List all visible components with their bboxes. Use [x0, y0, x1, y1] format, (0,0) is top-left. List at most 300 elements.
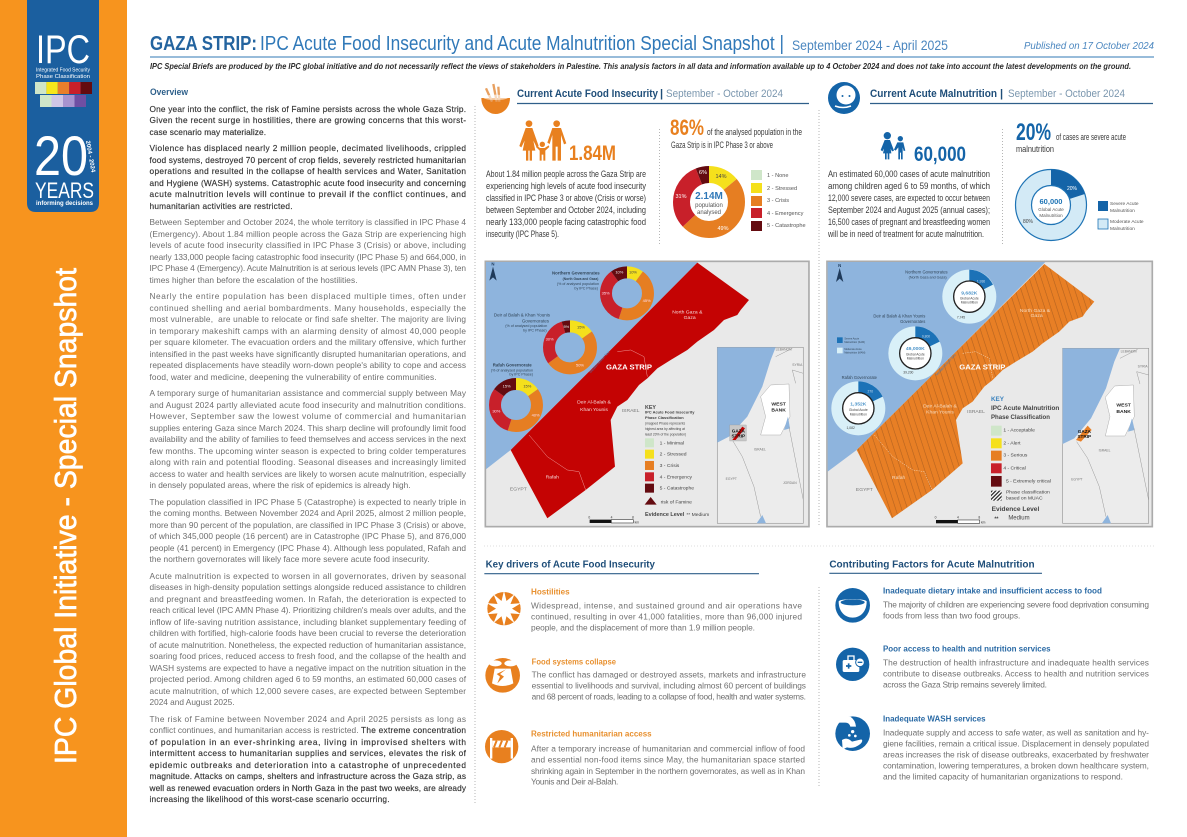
paragraph: malnutrition: children with fortified, high-calorie foods have been crucial to reverse the deterioration	[150, 628, 466, 638]
donut captions: Governorates	[900, 319, 925, 324]
logo tab: IPC 20 years: informing decisions	[36, 201, 94, 207]
map legend: severity: Malnutrition (SAM)	[844, 341, 865, 344]
key: IPC acute malnutrition: **	[994, 517, 999, 523]
map: acute malnutrition	[827, 261, 1152, 527]
legend: IPC phases: 2 - Stressed	[767, 186, 797, 192]
inset map: SYRIA	[1138, 365, 1148, 369]
inset map: GAZA	[732, 429, 746, 434]
map labels: ISRAEL	[622, 408, 640, 414]
donut: northern governorates: 7,745	[957, 315, 965, 319]
donut: deir al balah and khan younis: Malnutrition	[907, 357, 924, 361]
inset map: GAZA	[1078, 429, 1092, 434]
north arrow	[489, 261, 497, 281]
donut chart: population by phase: analysed	[697, 210, 721, 216]
legend: IPC phases: 5 - Catastrophe	[767, 223, 806, 229]
text: malnutrition summary: An estimated 60,000 cases of acute malnutrition	[828, 169, 990, 179]
paragraph: malnutrition: diseases in high-density population settings alongside reduced assistance to children	[150, 582, 466, 592]
factor: dietary intake: The majority of children are experiencing severe food deprivation consuming	[883, 600, 1149, 610]
overview text column	[148, 87, 467, 804]
map labels: Deir Al-Balah &	[923, 404, 958, 410]
inset map	[1063, 348, 1149, 523]
paragraph: projection: The population classified in IPC Phase 5 (Catastrophe) is expected to nearly triple in	[150, 497, 466, 507]
text: food insecurity summary: insecurity (IPC Phase 5).	[486, 229, 559, 239]
paragraph: projection: people (41 percent) in Emergency (IPC Phase 4). Although less populated, Rafah and	[150, 543, 466, 553]
driver: restricted humanitarian access: Younis and Deir al-Balah.	[531, 777, 618, 787]
factor: dietary intake	[883, 587, 1149, 621]
stat: 86%: of the analysed population in the	[707, 127, 802, 137]
heading: current acute food insecurity: |	[660, 88, 663, 100]
inset map: SYRIA	[792, 363, 803, 367]
text: malnutrition summary: September 2024 and August 2025 (annual cases);	[828, 205, 990, 215]
key: IPC acute food insecurity	[645, 405, 709, 518]
key: IPC acute food insecurity: 5 - Catastrophe	[660, 486, 694, 492]
sea	[486, 262, 698, 469]
text: food insecurity summary: nearly 133,000 people facing catastrophic food	[486, 217, 646, 227]
paragraph: projection: more than 90 percent of the population, are classified in IPC Phase 3 (Crisis) or above,	[150, 520, 466, 530]
inset map: STRIP	[1077, 434, 1091, 439]
key: IPC acute food insecurity: 4 - Emergency	[660, 475, 693, 481]
donut chart: population by phase: 49%	[717, 226, 729, 232]
inset map: ISRAEL	[1099, 449, 1111, 453]
paragraph: classification: IPC Phase 4 (Emergency). Acute Malnutrition is at serious levels (IPC AMN Phase 3), ten	[150, 263, 466, 273]
driver: food systems collapse: and 68 percent of roads, leading to a collapse of food, health and water systems.	[532, 692, 806, 702]
vertical title: IPC Global Initiative - Special Snapshot	[48, 268, 83, 764]
legend: IPC phases: 3 - Crisis	[767, 198, 789, 204]
text: food insecurity summary: experiencing high levels of acute food insecurity	[486, 181, 646, 191]
section: key drivers	[484, 560, 806, 787]
heading: current acute malnutrition	[870, 88, 1153, 104]
driver: restricted humanitarian access: and essential non-food items since May, the humanitarian space started	[531, 755, 805, 765]
key: IPC acute malnutrition: Evidence Level	[992, 506, 1039, 513]
factor: WASH: Inadequate WASH services	[883, 715, 986, 724]
paragraph: displacement: food, water and medicine, deepening the vulnerability of entire communities.	[150, 372, 436, 382]
key: IPC acute malnutrition: based on MUAC	[1006, 496, 1043, 502]
donut captions: by IPC Phase)	[523, 329, 547, 333]
inset map: WEST	[771, 402, 786, 408]
donut: rafah: 1,082	[846, 426, 855, 430]
text: food insecurity summary: classified in IPC Phase 3 or above (Crisis or worse)	[486, 193, 646, 203]
inset map: LEBANON	[776, 348, 792, 352]
factor: WASH: Inadequate supply and access to safe water, as well as sanitation and hy-	[883, 728, 1149, 738]
driver: restricted humanitarian access	[531, 730, 805, 787]
key: IPC acute malnutrition	[991, 396, 1059, 523]
paragraph: displacement: continued shelling and aerial bombardments. Many households, especially the	[150, 303, 466, 313]
gaza strip area	[511, 263, 749, 518]
title: IPC Acute Food Insecurity and Acute Malnutrition Special Snapshot |	[260, 33, 784, 55]
key: IPC acute food insecurity: highest area by affecting at	[645, 427, 685, 431]
driver: hostilities	[531, 588, 802, 633]
map: food insecurity	[485, 261, 809, 527]
inset map: WEST	[1116, 402, 1131, 408]
factor: health services: Poor access to health and nutrition services	[883, 645, 1051, 654]
paragraph: malnutrition: and pregnant and breastfeeding women. In Rafah, the deterioration is expected to	[150, 594, 466, 604]
key: IPC acute food insecurity: Phase Classification	[645, 415, 684, 420]
paragraph: projection: the coming months. Between November 2024 and April 2025, almost 2 million people,	[150, 508, 466, 518]
icon: children	[881, 132, 905, 159]
donut: deir al balah and khan younis: 15%	[577, 325, 585, 330]
donut: northern governorates: 1,936	[977, 280, 985, 284]
map labels: Gaza	[1031, 313, 1043, 319]
paragraph: malnutrition: inflow of life-saving nutrition assistance, including blanket supplementary feeding of	[150, 617, 467, 627]
donut captions: (North Gaza and Gaza)	[563, 277, 598, 281]
map labels: GAZA STRIP	[606, 363, 652, 372]
logo tab: IPC 20 years: Integrated Food Security	[36, 68, 90, 74]
paragraph: assistance: in densely populated areas, where the risk of epidemics is already high.	[150, 480, 410, 490]
factor: WASH	[883, 715, 1149, 782]
driver: restricted humanitarian access: shrinking again in September in the northern governorates, as well as in Khan	[531, 766, 805, 776]
paragraph: assistance	[150, 388, 467, 490]
map labels	[856, 308, 1051, 493]
driver: restricted humanitarian access: After a temporary increase of humanitarian and commercial inflow of food	[531, 744, 805, 754]
scale bar: 0	[588, 515, 590, 519]
paragraph: violence	[150, 143, 466, 211]
paragraph: malnutrition: projected period. Among children aged 6 to 59 months, an estimated 60,000 cases of	[150, 674, 467, 684]
paragraph: risk of famine: epidemic outbreaks and deterioration into a catastrophe of unprecedented	[150, 760, 466, 770]
icon: bowl of grain	[481, 84, 510, 114]
icon: child face	[828, 82, 860, 114]
north arrow: N	[491, 261, 495, 266]
donut: deir al balah and khan younis: 5%	[563, 324, 570, 329]
paragraph: risk of famine: The extreme concentration	[361, 725, 466, 735]
paragraph: classification: levels of acute food insecurity classified in IPC Phase 3 (Crisis) or above, including	[150, 240, 466, 250]
factor: health services: The destruction of health infrastructure and inadequate health services	[883, 658, 1149, 668]
paragraph: classification: Between September and October 2024, the whole territory is classified in IPC Phase 4	[150, 217, 466, 227]
driver: hostilities: continued, resulting in over 41,000 fatalities, more than 96,000 injured	[531, 612, 802, 622]
map legend: severity: Moderate Acute	[844, 348, 862, 351]
icon: food sacks	[485, 658, 520, 693]
key: IPC acute food insecurity: ** Medium	[686, 512, 709, 518]
logo tab: IPC 20 years: IPC	[36, 28, 90, 72]
paragraph: assistance: few months. The upcoming winter season is expected to bring colder temperatures	[150, 446, 466, 456]
factor: dietary intake: foods from less than two food groups.	[883, 611, 1020, 621]
paragraph: intro: One year into the conflict, the risk of Famine persists across the whole Gaza Strip.	[150, 104, 466, 114]
publication date: Published on 17 October 2024	[1024, 40, 1154, 52]
key: IPC acute malnutrition: 1 - Acceptable	[1003, 428, 1035, 434]
donut chart: global acute malnutrition: Global Acute	[1038, 207, 1064, 212]
legend: malnutrition severity	[1098, 201, 1144, 232]
donut: deir al balah and khan younis: 30%	[546, 337, 554, 342]
key: IPC acute food insecurity: KEY	[645, 405, 656, 411]
paragraph: violence: and Hygiene (WASH) systems. Catastrophic acute food insecurity and concerning	[150, 178, 466, 188]
map labels: Khan Younis	[926, 409, 954, 415]
paragraph: classification: (Emergency). About 1.84 million people across the Gaza Strip are experiencing high	[150, 229, 466, 239]
donut: rafah: Malnutrition	[850, 412, 867, 416]
paragraph: malnutrition	[150, 571, 467, 707]
donut chart: global acute malnutrition: 80%	[1023, 219, 1034, 225]
icon: medical kit	[836, 648, 869, 681]
factor: health services: contribute to disease outbreaks. Access to health and nutrition services	[883, 669, 1149, 679]
key: IPC acute malnutrition: 2 - Alert	[1003, 441, 1021, 447]
paragraph: violence: food systems, destroyed 70 percent of crop fields, severely restricted humanitarian	[150, 155, 466, 165]
driver: hostilities: Widespread, intense, and sustained ground and air operations have	[531, 601, 802, 611]
map labels: North Gaza &	[1020, 308, 1051, 314]
map labels	[510, 309, 703, 492]
map labels: Gaza	[684, 315, 696, 321]
driver: food systems collapse: Food systems collapse	[532, 658, 617, 667]
paragraph: risk of famine: of population in an ever-shrinking area, living in improvised shelters with	[150, 737, 466, 747]
donut: rafah: 15%	[523, 383, 532, 388]
donut: deir al balah and khan younis: 39,200	[903, 370, 914, 374]
text: food insecurity summary	[486, 169, 646, 239]
key: IPC acute malnutrition: KEY	[991, 396, 1005, 403]
map labels: Mediterranean Sea	[588, 350, 610, 374]
inset map: BANK	[771, 408, 786, 414]
inset map	[717, 347, 803, 523]
text: food insecurity summary: About 1.84 million people across the Gaza Strip are	[486, 169, 646, 179]
text: malnutrition summary: among children aged 6 to 59 months, of which	[828, 181, 990, 191]
legend: IPC phases: 1 - None	[767, 173, 788, 179]
map labels: ISRAEL	[967, 409, 985, 415]
paragraph: displacement: most vulnerable, are unable to relocate or find safe shelter. The majority are living	[150, 314, 466, 324]
donut: northern governorates: 35%	[602, 290, 610, 295]
donut: northern governorates: 10%	[629, 269, 637, 274]
map legend: severity: Malnutrition (MAM)	[844, 352, 865, 355]
donut captions: Northern Governorates	[552, 271, 600, 276]
paragraph: assistance: along with rain and potential flooding. Seasonal diseases and increasingly limited	[150, 457, 466, 467]
scale bar: 8	[632, 515, 634, 519]
donut captions: Deir al Balah & Khan Younis	[494, 312, 551, 317]
key: IPC acute malnutrition: 5 - Extremely critical	[1006, 479, 1051, 485]
donut captions: (% of analysed population	[491, 368, 533, 372]
key: IPC acute malnutrition: Phase classification	[1006, 490, 1050, 496]
donut captions: Deir al Balah & Khan Younis	[873, 314, 925, 319]
paragraph: displacement: intensified in the past weeks have significantly disrupted humanitarian operations, and	[150, 349, 466, 359]
heading: current acute malnutrition: |	[1000, 88, 1003, 100]
donut: rafah	[492, 383, 540, 426]
north arrow	[836, 263, 843, 282]
map labels: Mediterranean Sea	[935, 353, 957, 377]
paragraph: projection	[150, 497, 466, 564]
stat: 86%	[670, 115, 802, 150]
stat: 60,000: 60,000	[914, 143, 966, 166]
map labels: Rafah	[892, 475, 906, 481]
paragraph: intro: Given the recent surge in hostilities, there are growing concerns that this worst-	[150, 115, 466, 125]
donut chart: global acute malnutrition	[1016, 169, 1086, 240]
paragraph: violence: acute malnutrition levels will continue to prevail if the conflict continues, and	[150, 189, 466, 199]
donut: deir al balah and khan younis	[546, 324, 591, 368]
donut captions: Northern Governorates	[905, 269, 948, 274]
stat: 20%: of cases are severe acute	[1056, 132, 1126, 142]
driver: food systems collapse	[532, 658, 806, 702]
paragraph: risk of famine: conflict continues, and humanitarian access is restricted.	[150, 725, 358, 735]
donut captions: (% of analysed population	[505, 324, 547, 328]
donut: rafah	[831, 381, 885, 435]
text: malnutrition summary: 16,500 cases of pregnant and breastfeeding women	[828, 217, 990, 227]
sea	[828, 262, 1045, 472]
donut: deir al balah and khan younis: Global Acute	[906, 353, 925, 357]
paragraph: malnutrition: WASH systems are expected to have a negative impact on the nutrition situation in the	[150, 663, 466, 673]
paragraph: displacement: Nearly the entire population has been displaced multiple times, often under	[150, 291, 466, 301]
heading: current acute food insecurity	[517, 88, 809, 104]
map labels: GAZA STRIP	[959, 363, 1005, 372]
paragraph: classification	[150, 217, 466, 285]
text: malnutrition summary	[827, 169, 990, 239]
logo tab: IPC 20 years	[27, 0, 99, 212]
donut: deir al balah and khan younis: 50%	[576, 362, 584, 367]
title: GAZA STRIP:	[150, 33, 257, 55]
paragraph: displacement	[150, 291, 466, 382]
paragraph: violence: Violence has displaced nearly 2 million people, decimated livelihoods, crippled	[150, 143, 466, 153]
paragraph: intro	[150, 104, 466, 137]
paragraph: assistance: A temporary surge of humanitarian assistance and commercial supply between May	[150, 388, 467, 398]
donut chart: population by phase: 2.14M	[695, 191, 723, 202]
key: IPC acute malnutrition: Phase Classification	[991, 414, 1050, 421]
heading: current acute malnutrition: Current Acute Malnutrition	[870, 88, 997, 100]
donut captions: Governorates	[522, 319, 550, 324]
key: IPC acute malnutrition: IPC Acute Malnutrition	[991, 405, 1059, 412]
donut chart: population by phase: 6%	[699, 170, 707, 176]
inset map: ISRAEL	[754, 448, 766, 452]
donut: northern governorates: 9,682K	[961, 290, 978, 296]
key: IPC acute malnutrition: Medium	[1008, 516, 1030, 522]
text: malnutrition summary: 12,000 severe cases, are expected to occur between	[828, 193, 990, 203]
icon: family	[519, 120, 566, 161]
donut captions	[491, 271, 600, 377]
donut: northern governorates	[942, 270, 996, 324]
paragraph: intro: case scenario may materialize.	[150, 127, 266, 137]
donut captions: by IPC Phase)	[509, 373, 533, 377]
inset map: EGYPT	[1071, 478, 1083, 482]
donut chart: population by phase	[675, 170, 736, 232]
stat: 20%: 20%	[1016, 119, 1051, 146]
paragraph: malnutrition: 2024 and August 2025.	[150, 697, 234, 707]
overview heading: Overview	[150, 87, 189, 98]
key: IPC acute food insecurity: 2 - Stressed	[660, 452, 687, 458]
scale bar: 0	[935, 516, 937, 520]
key: IPC acute food insecurity: least 20% of the population)	[645, 432, 686, 436]
inset map: STRIP	[731, 434, 745, 439]
key: IPC acute food insecurity: IPC Acute Food Insecurity	[645, 410, 695, 415]
paragraph: risk of famine: intermittent access to humanitarian supplies and services, elevates the risk of	[150, 748, 467, 758]
donut: northern governorates: 45%	[643, 298, 651, 303]
scale bar: 4	[957, 516, 959, 520]
scale bar: 4	[611, 515, 613, 519]
donut: northern governorates: Global Acute	[960, 296, 979, 300]
paragraph: violence: operations and resulted in the collapse of health services and Water, Sanitation	[150, 166, 466, 176]
donut: northern governorates: 10%	[615, 269, 624, 274]
scale bar: 8	[978, 516, 980, 520]
stat: 86%: 86%	[670, 115, 704, 140]
logo tab: IPC 20 years: Phase Classification	[36, 74, 90, 80]
scale bar: km	[981, 521, 986, 525]
section: contributing factors	[829, 560, 1149, 782]
title: September 2024 - April 2025	[792, 37, 948, 53]
paragraph: displacement: repeated displacements have steadily worn-down people's ability to cope and access	[150, 360, 466, 370]
text: food insecurity summary: between September and October 2024, including	[486, 205, 646, 215]
donut chart: population by phase: population	[695, 203, 723, 209]
key: IPC acute food insecurity: risk of Famine	[661, 500, 692, 506]
heading: current acute food insecurity: Current Acute Food Insecurity	[517, 88, 659, 100]
key: IPC acute food insecurity: (mapped Phase represents	[645, 422, 685, 426]
donut: deir al balah and khan younis: 49,000K	[906, 346, 925, 352]
paragraph: risk of famine: magnitude. Attacks on camps, shelters and infrastructure across the Gaza strip, as	[150, 771, 466, 781]
driver: hostilities: people, and the displacement of more than 1.9 million people.	[531, 623, 755, 633]
inset map: JORDAN	[783, 481, 797, 485]
stat: 20%: malnutrition	[1016, 144, 1054, 154]
paragraph: malnutrition: reach critical level (IPC AMN Phase 4). Prioritizing children's meals over adults, and the	[150, 605, 466, 615]
donut chart: population by phase: 31%	[675, 194, 687, 200]
donut captions: (% of analysed population	[557, 282, 599, 286]
text: malnutrition summary: will be in need of treatment for acute malnutrition.	[827, 229, 984, 239]
icon: bowl	[835, 588, 870, 623]
map labels: EGYPT	[510, 486, 527, 492]
donut: rafah: 270	[868, 390, 873, 394]
paragraph: violence: humanitarian activities are restricted.	[150, 201, 292, 211]
key: IPC acute malnutrition: 4 - Critical	[1003, 466, 1026, 472]
donut chart: global acute malnutrition: Malnutrition	[1039, 213, 1063, 218]
donut: northern governorates	[602, 269, 651, 314]
factor: health services: across the Gaza Strip remains severely limited.	[883, 680, 1047, 690]
donut captions: (North Gaza and Gaza)	[909, 275, 947, 279]
scale bar	[588, 515, 639, 524]
paragraph: risk of famine	[148, 714, 467, 804]
paragraph: displacement: per square kilometer. The evacuation orders and the military offensive, which further	[150, 337, 466, 347]
heading: current acute malnutrition: September - October 2024	[1008, 88, 1125, 100]
key: IPC acute food insecurity: Evidence Level	[645, 512, 685, 518]
paragraph: assistance: However, September saw the lowest volume of commercial and humanitarian	[150, 411, 466, 421]
factor: WASH: contamination, lowering temperatures, a broken down healthcare system,	[883, 761, 1149, 771]
scale bar: km	[635, 520, 639, 524]
inset map: BANK	[1116, 409, 1131, 415]
icon: barrier	[485, 730, 518, 763]
legend: IPC phases	[751, 170, 806, 231]
factor: health services	[883, 645, 1149, 690]
scale bar	[935, 516, 986, 525]
paragraph: projection: the northern governorates will likely face more severe acute food insecurity.	[150, 554, 430, 564]
donut captions: by IPC Phase)	[574, 287, 598, 291]
paragraph: risk of famine: well as renewed evacuation orders in North Gaza in the past two weeks, are already	[148, 783, 467, 793]
donut chart: global acute malnutrition: 60,000	[1040, 197, 1062, 206]
factor: WASH: areas increases the risk of disease outbreaks, exacerbated by freshwater	[883, 749, 1149, 759]
icon: water and hand	[835, 716, 870, 751]
inset map: EGYPT	[726, 477, 737, 481]
driver: food systems collapse: essential to livelihoods and survival, including almost 60 percent of buildings	[532, 681, 806, 691]
paragraph: malnutrition: of acute malnutrition. Nonetheless, the expected reduction of humanitarian assistance,	[150, 640, 466, 650]
logo tab: IPC 20 years: 2004 - 2024	[84, 140, 96, 174]
factor: dietary intake: Inadequate dietary intake and insufficient access to food	[883, 587, 1102, 596]
paragraph: malnutrition: Acute malnutrition is expected to worsen in all governorates, driven by seasonal	[150, 571, 466, 581]
donut: northern governorates: Malnutrition	[961, 301, 978, 305]
paragraph: malnutrition: soaring food prices, reduced access to fresh food, and the collapse of the health and	[150, 651, 466, 661]
stat: 86%: Gaza Strip is in IPC Phase 3 or above	[671, 140, 773, 150]
paragraph: classification: times higher than before the escalation of the hostilities.	[150, 275, 358, 285]
legend: malnutrition severity: Malnutrition	[1110, 226, 1135, 232]
map labels: EGYPT	[856, 487, 873, 493]
map legend: severity: Severe Acute	[844, 337, 860, 340]
donut: rafah: 1,352K	[850, 401, 867, 407]
paragraph: displacement: in temporary makeshift camps with an alarming density of almost 40,000 people	[150, 326, 466, 336]
heading: current acute food insecurity: September - October 2024	[666, 88, 783, 100]
icon: explosion	[487, 591, 521, 627]
donut: rafah: 40%	[532, 412, 540, 417]
logo tab: IPC 20 years: 20	[34, 124, 88, 187]
key: IPC acute food insecurity: 1 - Minimal	[660, 440, 684, 446]
north arrow: N	[838, 263, 841, 268]
donut: deir al balah and khan younis: 9,800	[922, 334, 930, 338]
paragraph: classification: nearly 133,000 people facing catastrophic food insecurity (IPC Phase 5) and 664,000, in	[150, 252, 466, 262]
driver: restricted humanitarian access: Restricted humanitarian access	[531, 730, 652, 739]
factor: WASH: and the limited capacity of humanitarian organizations to respond.	[883, 772, 1123, 782]
map labels: Rafah	[546, 475, 559, 481]
stat: 20%	[1016, 119, 1126, 154]
paragraph: assistance: availability and the ability of families to feed themselves and access services in the next	[150, 434, 467, 444]
heading: Contributing Factors for Acute Malnutrition	[829, 560, 1035, 571]
donut: rafah: 15%	[503, 384, 511, 389]
paragraph: risk of famine: increasing the likelihood of this worst-case scenario occurring.	[150, 794, 390, 804]
driver: hostilities: Hostilities	[531, 588, 570, 597]
key: IPC acute malnutrition: 3 - Serious	[1003, 453, 1028, 459]
legend: malnutrition severity: Malnutrition	[1110, 208, 1135, 214]
